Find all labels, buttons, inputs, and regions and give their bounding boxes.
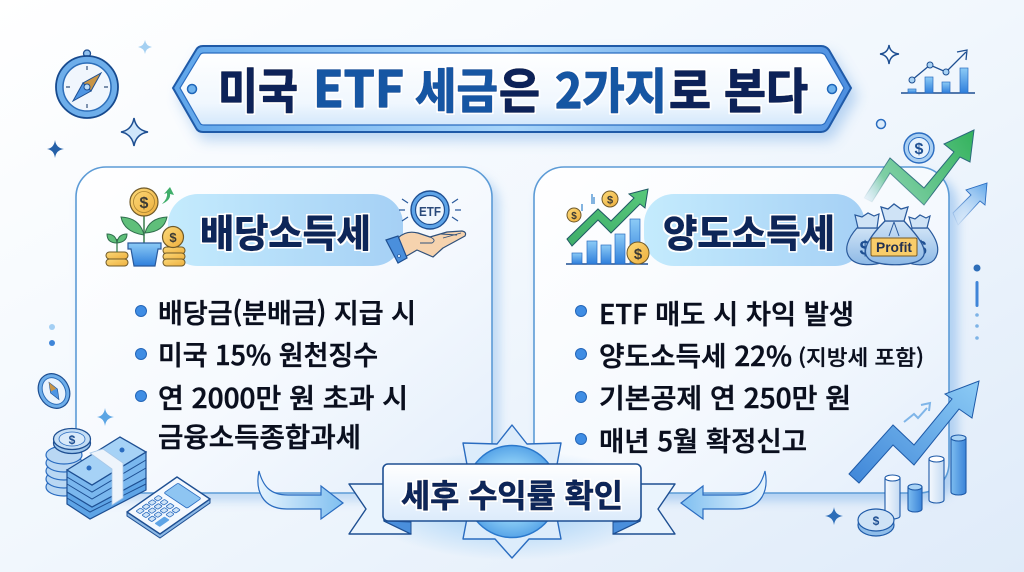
coin stack right	[163, 247, 185, 266]
icon: sparkle outlined	[121, 118, 148, 146]
icon: ring dot	[876, 120, 886, 128]
title text: 로	[669, 52, 711, 122]
badge text: 세후 수익률 확인	[401, 471, 623, 517]
title text: 본다	[724, 52, 808, 122]
icon: bar chart with green arrow: $	[634, 246, 643, 263]
icon: sparkle top right	[880, 45, 899, 64]
panel 2 heading pill: 양도소득세	[663, 203, 835, 258]
panel 2 heading pill	[644, 194, 865, 266]
small sprout	[107, 234, 127, 252]
stem and leaves	[121, 216, 167, 243]
title text: 은	[499, 52, 540, 122]
panel 1 heading pill	[168, 194, 403, 266]
ribbon tails	[349, 484, 675, 534]
arrow: right to badge	[681, 471, 766, 519]
small green arrow	[162, 187, 174, 204]
panel 1 bullet list: 미국 15% 원천징수	[158, 334, 378, 373]
icon: small tilted compass	[32, 368, 76, 414]
panel 1 bullet list: 금융소득종합과세	[158, 416, 361, 455]
title banner	[173, 46, 858, 140]
decorative dots left	[49, 324, 55, 346]
decorative dots right	[974, 264, 980, 340]
panel 2 bullet list: ETF 매도 시 차익 발생	[599, 293, 854, 332]
icon: cash bundle	[67, 437, 146, 519]
plant pot	[128, 243, 161, 266]
side coin: $	[169, 230, 177, 245]
ribbon main	[383, 464, 641, 521]
badge: after-tax return	[349, 425, 675, 560]
icon: blue dollar coin	[904, 133, 934, 163]
icon: plant with coins	[106, 187, 185, 266]
panel 2 bullet list: 양도소득세 22%	[599, 335, 792, 374]
panel 2 bullet list: 기본공제 연 250만 원	[599, 377, 851, 416]
title text: 2가지	[555, 52, 667, 122]
icon: coin stack: $	[69, 433, 76, 447]
icon: large green arrow	[864, 130, 974, 205]
panel 1 heading pill: 배당소득세	[200, 203, 371, 258]
icon: blue dollar coin: $	[915, 141, 924, 158]
center bag	[865, 204, 924, 265]
panel 1 bullet list: 배당금(분배금) 지급 시	[158, 292, 416, 331]
sunburst medallion	[446, 425, 578, 558]
panel 2 bullet list	[576, 293, 924, 459]
title text: 미국	[218, 52, 298, 122]
icon: calculator	[127, 477, 210, 538]
icon: big blue arrow with cylinders	[849, 381, 979, 536]
panel 2 bullet list: (지방세 포함)	[798, 342, 924, 372]
title text: 세금	[415, 52, 498, 122]
panel 1 bullet list: 연 2000만 원 초과 시	[158, 377, 408, 416]
icon: compass	[56, 50, 118, 118]
blue coin	[858, 509, 894, 536]
icon: bar chart with green arrow: $	[607, 194, 613, 206]
icon: sparkle dark	[47, 140, 64, 158]
panel: dividend income tax	[76, 167, 500, 501]
icon: sparkle lower right	[825, 507, 843, 525]
icon: hand with ETF coin: ETF	[419, 204, 441, 219]
icon: hand with ETF coin	[386, 191, 466, 263]
panel 2 bullet list: 매년 5월 확정신고	[599, 420, 807, 459]
left bag: $	[859, 238, 871, 260]
icon: sparkle light	[138, 40, 152, 54]
blue coin: $	[873, 514, 880, 528]
icon: coin stack	[46, 428, 90, 496]
icon: bar chart with green arrow: $	[571, 211, 577, 222]
right bag: $	[915, 238, 927, 260]
title text: ETF	[313, 50, 404, 122]
icon: small blue arrow	[953, 183, 987, 225]
coin stack left	[106, 252, 128, 266]
icon: small chart top right	[901, 50, 975, 93]
icon: bar chart with green arrow	[566, 189, 649, 264]
icon: money bags	[847, 204, 938, 265]
panel: capital gains tax	[534, 167, 958, 501]
panel 1 bullet list	[136, 292, 416, 455]
profit tag: Profit	[876, 239, 912, 255]
arrow: left to badge	[258, 471, 343, 519]
icon: sparkle lower left	[97, 408, 114, 426]
top coin: $	[140, 195, 149, 212]
title text	[218, 50, 808, 122]
cylinders	[885, 435, 966, 519]
